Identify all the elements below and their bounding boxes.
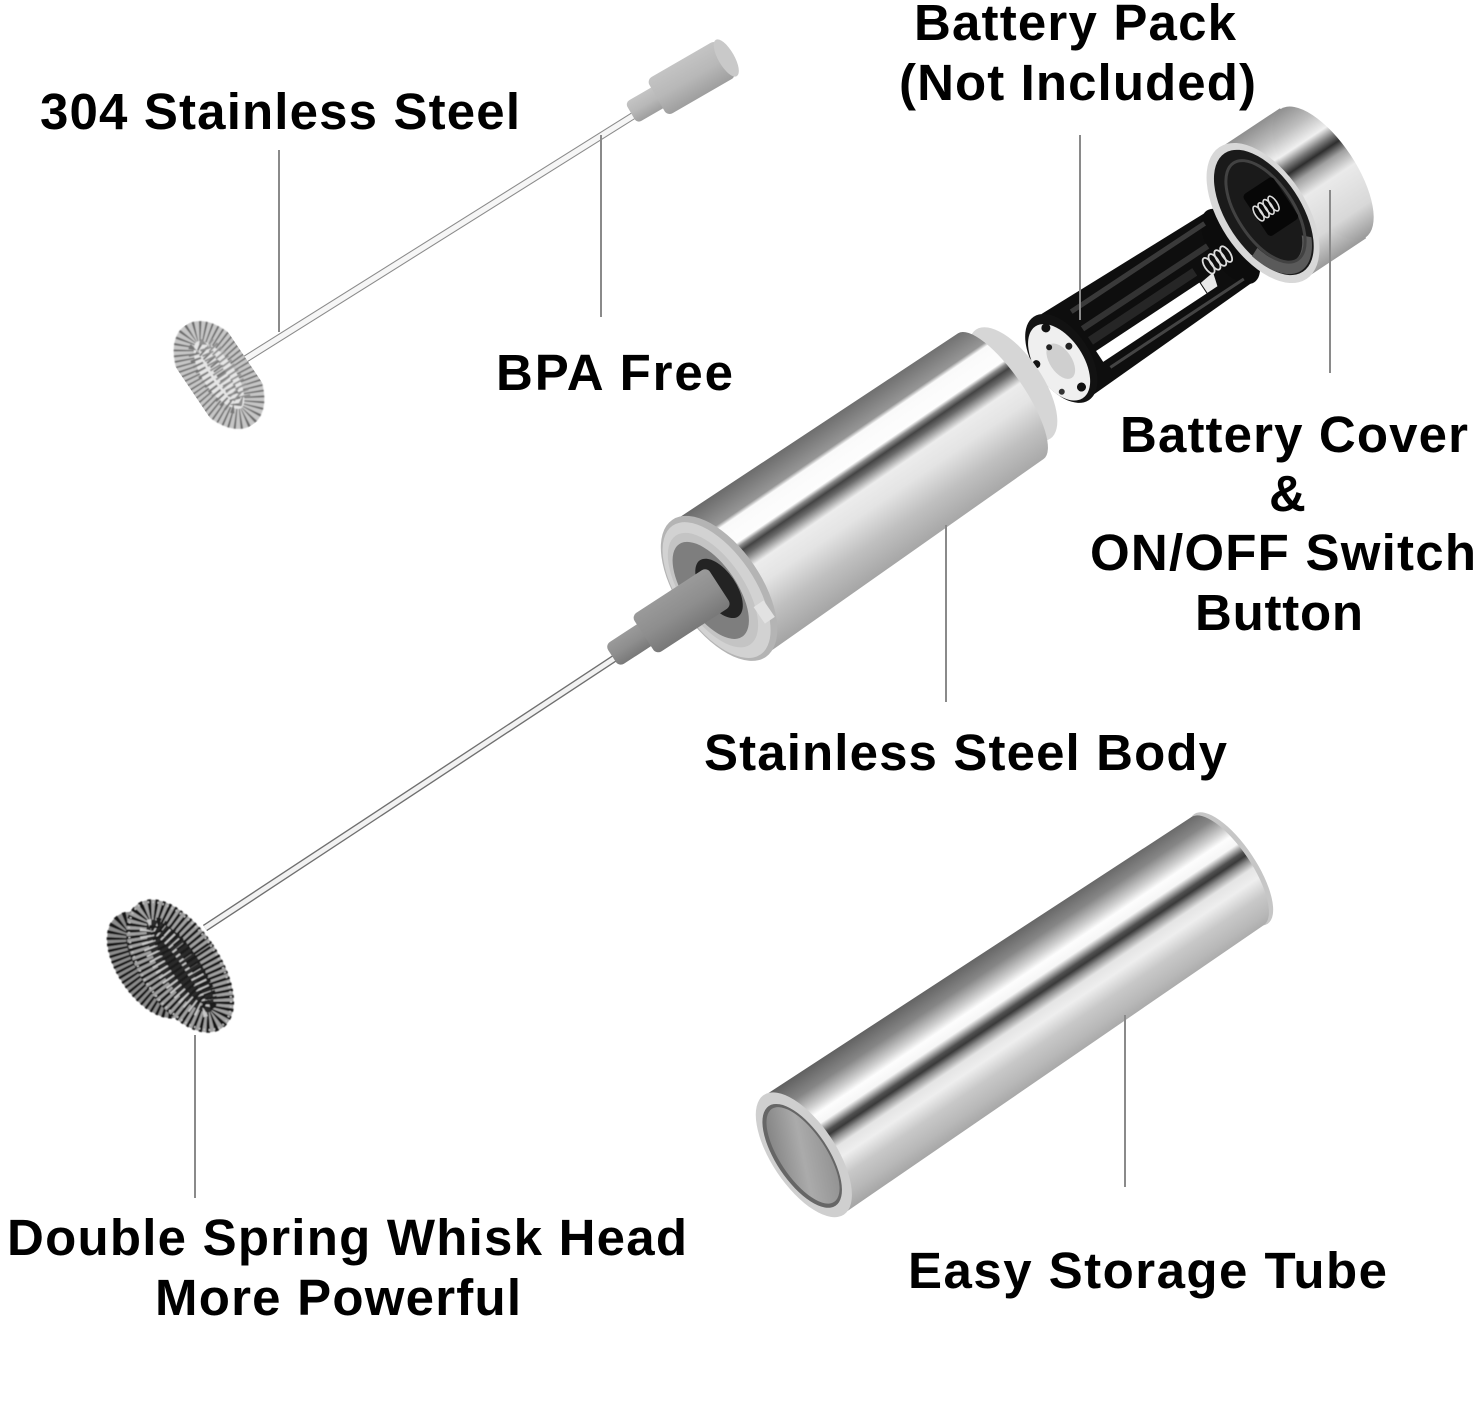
tube steel cylinder	[769, 799, 1287, 1211]
cover spring	[1251, 195, 1281, 223]
body steel cylinder	[678, 316, 1066, 652]
icon: battery cover with ON/OFF switch	[1184, 89, 1394, 303]
icon: stainless steel body	[599, 302, 1086, 681]
body grey plug	[599, 567, 732, 675]
battery spring	[1200, 244, 1234, 275]
label: Battery Cover and ON/OFF Switch Button: &	[1269, 465, 1306, 522]
label: Double Spring Whisk Head More Powerful: More Powerful	[155, 1269, 521, 1326]
label: Double Spring Whisk Head More Powerful	[7, 1209, 687, 1326]
label: Battery Cover and ON/OFF Switch Button: Button	[1195, 584, 1363, 641]
icon: small whisk attachment	[169, 36, 744, 431]
label: Battery Cover and ON/OFF Switch Button	[1090, 406, 1476, 641]
label: Battery Pack (Not Included)	[899, 0, 1256, 111]
body far collar	[952, 313, 1074, 455]
label: Double Spring Whisk Head More Powerful: Double Spring Whisk Head	[7, 1209, 687, 1266]
label: Battery Pack (Not Included): (Not Included)	[899, 54, 1256, 111]
label: 304 Stainless Steel: 304 Stainless Steel	[40, 83, 520, 140]
small whisk grey plug	[620, 36, 744, 131]
tube near end face	[737, 1077, 870, 1232]
body near collar and bore	[638, 496, 801, 681]
cover steel shell	[1220, 108, 1366, 278]
small whisk shaft	[244, 114, 636, 360]
label: BPA Free: BPA Free	[496, 344, 733, 401]
cover open face	[1184, 123, 1342, 303]
label: Stainless Steel Body: Stainless Steel Body	[704, 724, 1228, 781]
battery holder window	[1096, 283, 1207, 362]
small whisk coil head	[169, 319, 269, 431]
icon: easy storage tube	[737, 795, 1292, 1232]
label: Battery Cover and ON/OFF Switch Button: ON/OFF Switch	[1090, 524, 1476, 581]
tube far rim	[1173, 800, 1288, 938]
label: Battery Cover and ON/OFF Switch Button: Battery Cover	[1120, 406, 1468, 463]
double spring whisk head	[103, 885, 251, 1047]
label: Easy Storage Tube: Easy Storage Tube	[908, 1242, 1387, 1299]
icon: main frother shaft and double spring whisk	[103, 658, 615, 1047]
leader lines	[195, 135, 1330, 1198]
battery holder frame	[1042, 206, 1257, 394]
battery end plate	[1010, 301, 1112, 416]
icon: battery pack	[1010, 193, 1276, 416]
main shaft	[205, 658, 615, 928]
